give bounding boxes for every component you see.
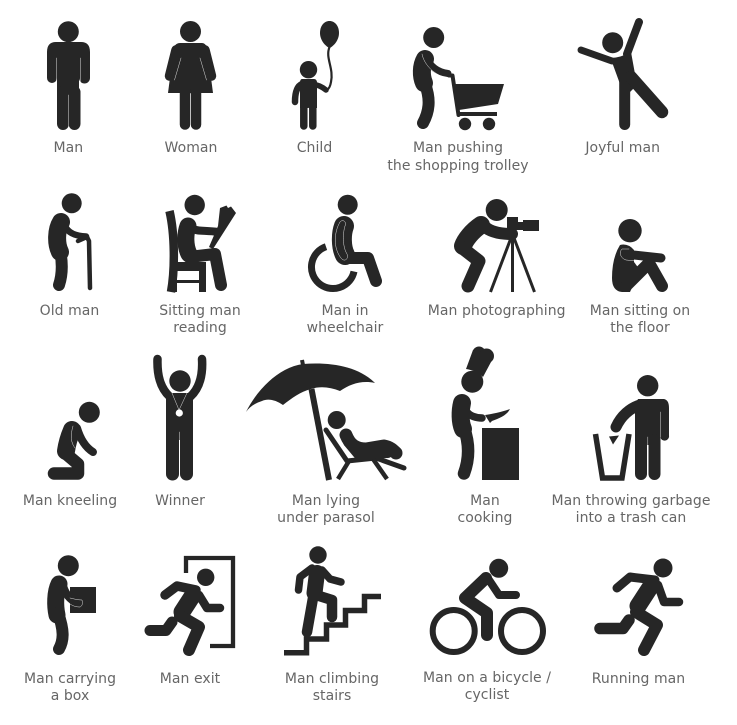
icon: parasol and deck chair: [246, 360, 404, 480]
label: Man on a bicycle / cyclist: Man on a bicycle /: [423, 670, 551, 686]
icon: man and trash can: [596, 375, 669, 478]
pictogram: Man climbing stairs: stairs: [313, 688, 351, 704]
pictogram: Man kneeling: [23, 402, 117, 509]
icon: man kneeling: [54, 402, 100, 474]
label: Man lying under parasol: Man lying: [292, 493, 360, 509]
pictogram: Man throwing garbage into a trash can: into a trash can: [576, 510, 686, 526]
icon: man with camera on tripod: [461, 199, 539, 292]
icon: old man with cane: [57, 193, 90, 288]
pictogram: Woman: [165, 21, 217, 156]
pictogram: Winner: [155, 359, 205, 509]
pictogram: Man sitting on the floor: [590, 219, 690, 336]
pictogram: Man: [47, 21, 90, 156]
pictogram: Sitting man reading: reading: [173, 320, 227, 336]
pictogram: Man carrying a box: [24, 555, 116, 704]
label: Man throwing garbage into a trash can: Man throwing garbage: [551, 493, 711, 509]
label: Sitting man reading: Sitting man: [159, 303, 241, 319]
icon: winner with medal: [157, 359, 202, 478]
pictogram: Man cooking: cooking: [458, 510, 512, 526]
icon: wheelchair: [311, 195, 376, 289]
pictogram: Sitting man reading: [159, 195, 241, 336]
pictogram: Man lying under parasol: under parasol: [277, 510, 375, 526]
label: Man kneeling: Man kneeling: [23, 493, 117, 509]
label: Joyful man: Joyful man: [584, 140, 660, 156]
icon: cyclist: [433, 559, 543, 652]
label: Man exit: Man exit: [160, 671, 221, 687]
pictogram: Man pushing the shopping trolley: the shopping trolley: [387, 158, 529, 174]
label: Man cooking: Man: [470, 493, 500, 509]
label: Man pushing the shopping trolley: Man pushing: [413, 140, 503, 156]
label: Man climbing stairs: Man climbing: [285, 671, 379, 687]
icon: man carrying a box: [56, 555, 96, 649]
icon: running man and exit door: [150, 558, 233, 650]
icon: woman: [168, 21, 213, 127]
label: Man in wheelchair: Man in: [321, 303, 369, 319]
icon: sitting man reading: [170, 195, 236, 292]
pictogram: Man in wheelchair: wheelchair: [307, 320, 384, 336]
label: Man: Man: [53, 140, 83, 156]
label: Man sitting on the floor: Man sitting on: [590, 303, 690, 319]
pictogram: Man on a bicycle / cyclist: [423, 559, 551, 703]
pictogram: Man lying under parasol: [246, 360, 404, 526]
label: Man carrying a box: Man carrying: [24, 671, 116, 687]
label: Man photographing: Man photographing: [428, 303, 566, 319]
pictogram: Man sitting on the floor: the floor: [610, 320, 670, 336]
label: Woman: Woman: [165, 140, 217, 156]
pictogram: Man on a bicycle / cyclist: cyclist: [465, 687, 510, 703]
icon: running man: [600, 558, 679, 650]
pictogram: Child: [295, 21, 339, 156]
label: Winner: Winner: [155, 493, 205, 509]
pictogram: Man cooking: [458, 346, 519, 526]
icon: joyful man: [581, 22, 662, 124]
pictogram: Man pushing the shopping trolley: [387, 27, 529, 174]
pictogram: Joyful man: [581, 22, 662, 156]
icon: man with trolley: [422, 27, 504, 130]
icon: man: [47, 21, 90, 127]
label: Child: Child: [297, 140, 332, 156]
icon: cook with knife: [461, 346, 519, 480]
pictogram: Man exit: [150, 558, 233, 687]
icon: child with balloon: [295, 21, 339, 129]
pictogram: Man climbing stairs: [284, 546, 381, 704]
icon: man sitting on the floor: [612, 219, 662, 292]
pictogram: Man photographing: [428, 199, 566, 319]
icon: man climbing stairs: [284, 546, 381, 653]
pictogram: Man carrying a box: a box: [51, 688, 89, 704]
pictogram: Man throwing garbage into a trash can: [551, 375, 711, 526]
label: Running man: Running man: [592, 671, 685, 687]
label: Old man: Old man: [40, 303, 99, 319]
pictogram: Running man: [592, 558, 685, 687]
pictogram: Old man: [40, 193, 99, 319]
pictogram: Man in wheelchair: [307, 195, 384, 336]
